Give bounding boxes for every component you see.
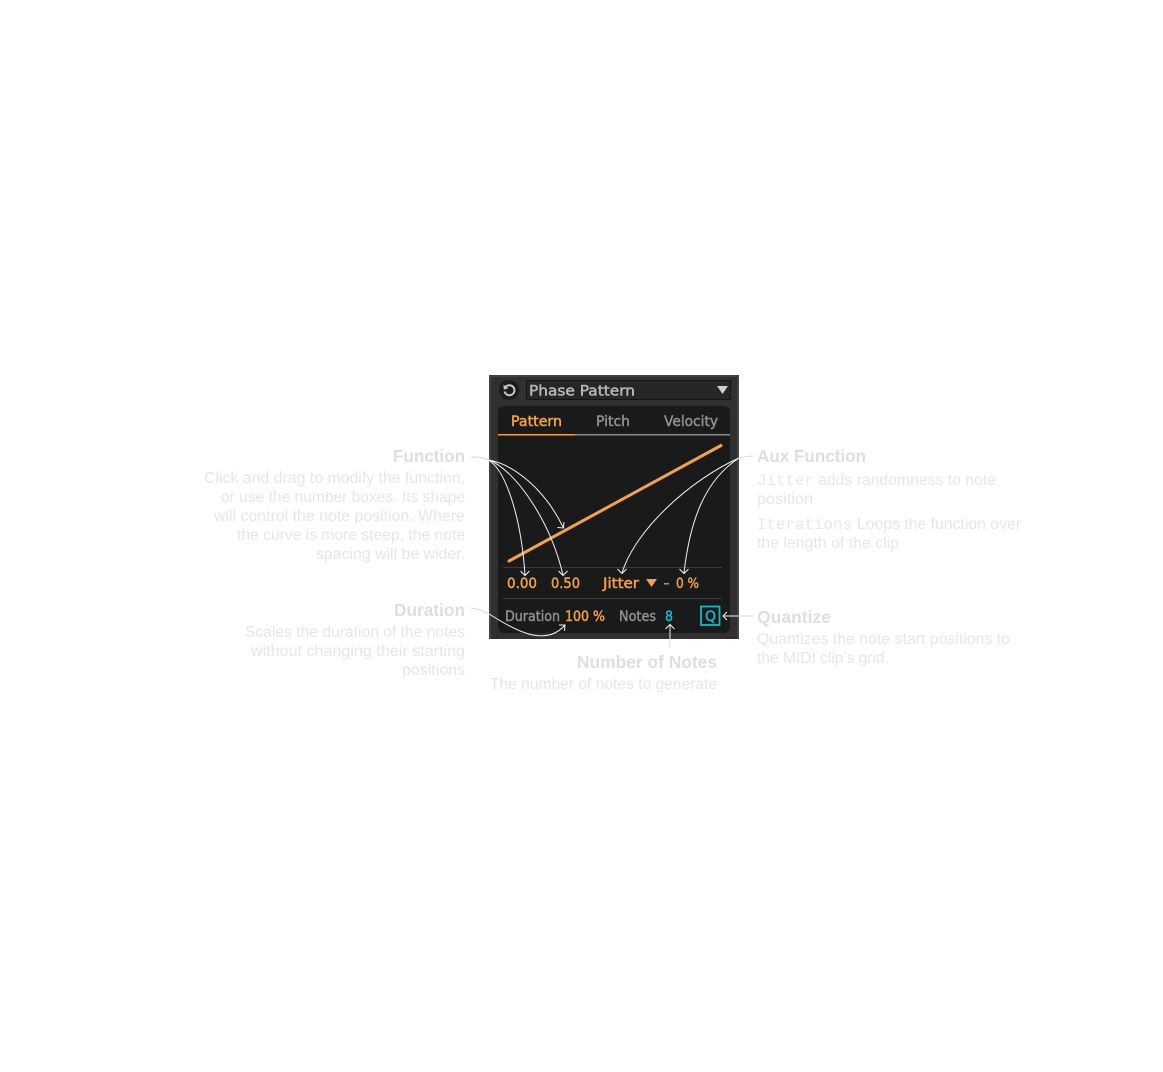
callout: duration: without changing their starting xyxy=(250,643,465,660)
tabs: Pattern xyxy=(511,414,562,430)
callout: quantize xyxy=(757,607,1010,667)
callout: function: Function xyxy=(393,446,465,466)
callout: aux function xyxy=(757,446,1021,552)
callout: function: Click and drag to modify the function, xyxy=(204,470,465,487)
icon: reset button xyxy=(499,380,519,400)
callout: function xyxy=(204,446,465,563)
callout: quantize: Quantizes the note start positions to xyxy=(757,631,1010,648)
function controls row: 0 % xyxy=(676,576,699,592)
tabs xyxy=(498,414,730,436)
callout: quantize: the MIDI clip’s grid. xyxy=(757,650,889,667)
callout: function: spacing will be wider. xyxy=(316,546,465,563)
callout: duration: positions xyxy=(402,662,465,679)
callout: aux function: the length of the clip xyxy=(757,535,899,552)
callout: function: or use the number boxes. Its shape xyxy=(221,489,465,506)
duration and notes row: 8 xyxy=(665,609,673,625)
callout: function: will control the note position. Where xyxy=(213,508,465,525)
duration and notes row: 100 % xyxy=(565,609,605,625)
function curve xyxy=(509,446,721,561)
duration and notes row: Duration xyxy=(505,609,560,625)
arrow: duration xyxy=(471,608,565,636)
duration and notes row xyxy=(505,609,673,625)
callout: aux function: adds randomness to note xyxy=(818,472,996,489)
preset dropdown xyxy=(526,380,730,400)
callout: aux function: Loops the function over xyxy=(857,516,1021,533)
callout: number of notes: Number of Notes xyxy=(577,652,717,672)
callout: aux function: position xyxy=(757,491,813,508)
callout: quantize: Quantize xyxy=(757,607,831,627)
callout: number of notes: The number of notes to generate xyxy=(490,676,717,693)
callout: duration: Duration xyxy=(394,600,465,620)
preset dropdown: Phase Pattern xyxy=(529,384,635,400)
function controls row: 0.50 xyxy=(551,576,580,592)
function controls row xyxy=(507,576,699,592)
function controls row: Jitter xyxy=(602,576,639,592)
tabs: Pitch xyxy=(596,414,630,430)
callout: duration xyxy=(245,600,465,679)
callout: aux function: Aux Function xyxy=(757,446,866,466)
callout: aux function: Iterations xyxy=(757,516,852,534)
inner panel xyxy=(498,406,730,633)
arrows: aux function xyxy=(618,456,753,574)
callout: aux function: Jitter xyxy=(757,472,814,490)
quantize button: Q xyxy=(705,609,716,625)
arrow: number of notes xyxy=(666,624,674,648)
tabs: Velocity xyxy=(664,414,718,430)
callout: function: the curve is more steep, the note xyxy=(237,527,465,544)
callout: number of notes xyxy=(490,652,717,693)
arrow: quantize xyxy=(723,612,753,620)
callout: duration: Scales the duration of the notes xyxy=(245,624,465,641)
arrows: function xyxy=(471,457,568,576)
quantize button xyxy=(701,606,720,625)
duration and notes row: Notes xyxy=(619,609,656,625)
function controls row: 0.00 xyxy=(507,576,537,592)
panel: device UI xyxy=(489,375,739,639)
